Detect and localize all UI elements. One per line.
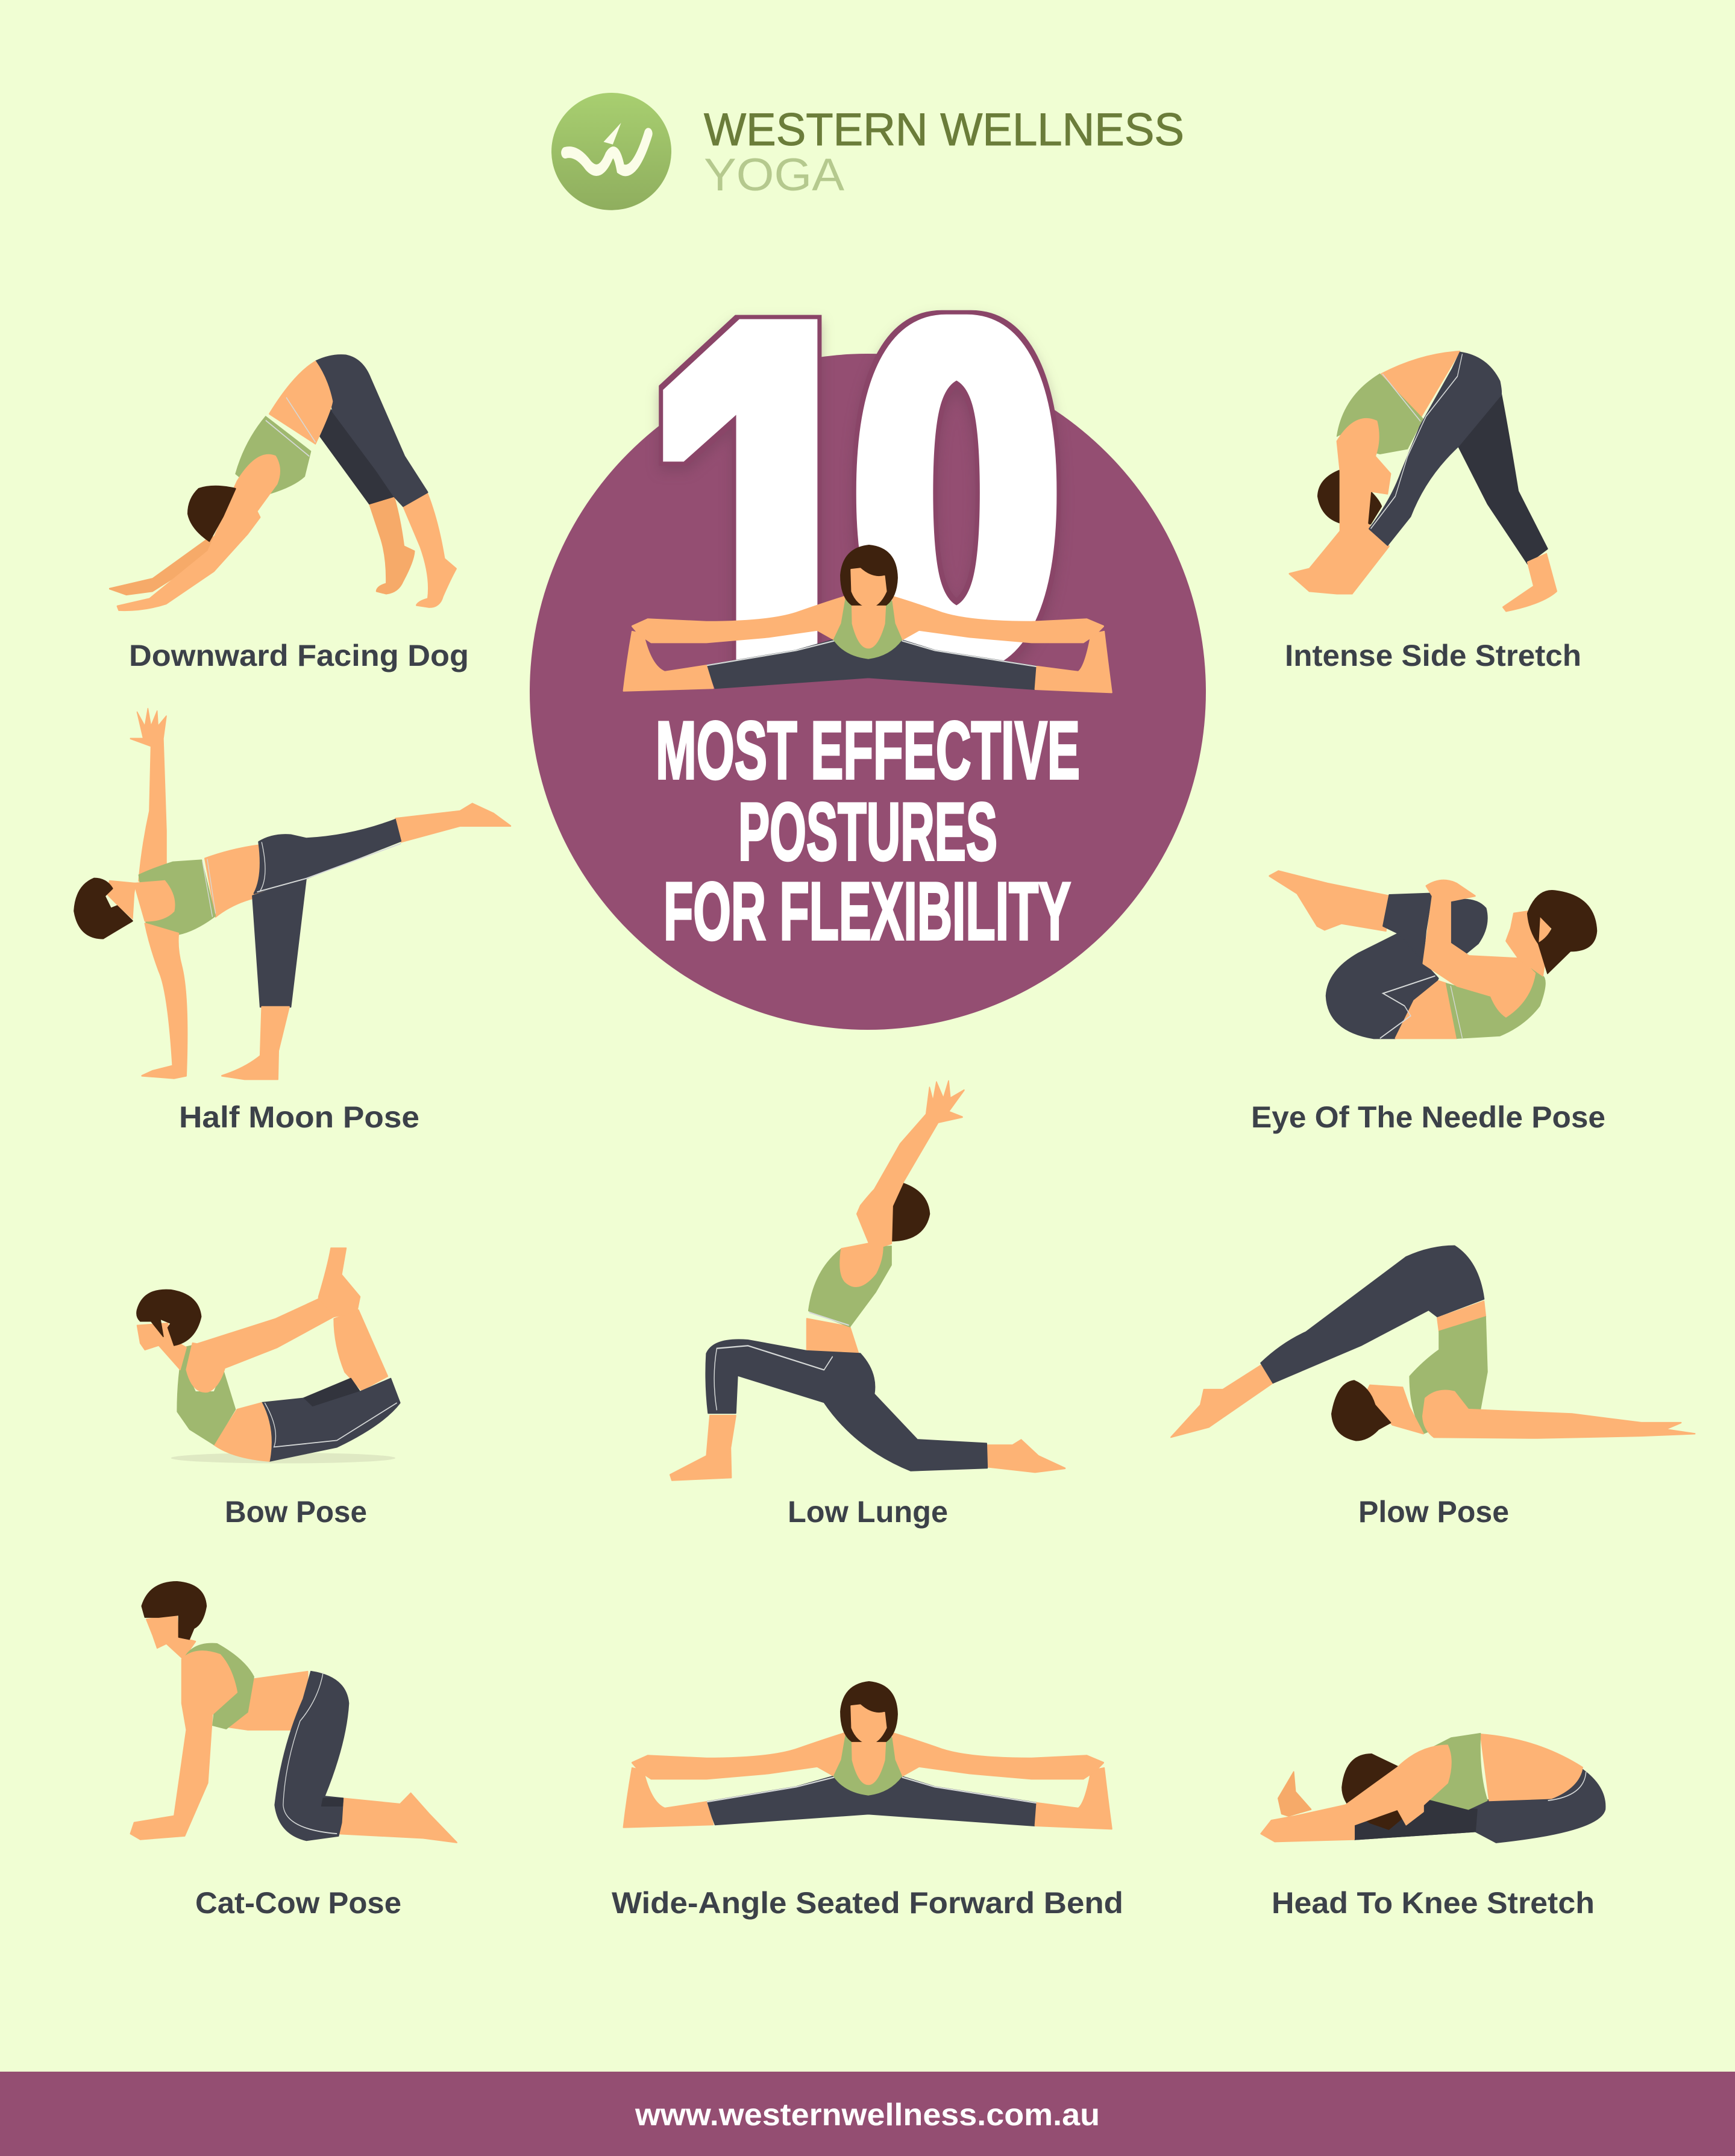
pose panel: Head To Knee Stretch bbox=[1261, 1734, 1605, 1920]
figure bbox=[670, 1081, 1065, 1480]
figure bbox=[130, 1582, 457, 1843]
pose panel: Intense Side Stretch bbox=[1285, 351, 1581, 672]
pose panel: Bow Pose bbox=[137, 1248, 400, 1529]
pose panel: Eye Of The Needle Pose bbox=[1251, 871, 1605, 1134]
label: Head To Knee Stretch bbox=[1272, 1886, 1595, 1920]
label: Low Lunge bbox=[788, 1495, 948, 1529]
digit 0: 0 bbox=[852, 230, 1061, 773]
title line 2: POSTURES bbox=[738, 786, 997, 877]
hero figure: wide-angle pose bbox=[623, 545, 1112, 692]
figure bbox=[1269, 871, 1596, 1038]
brand name: WESTERN WELLNESS bbox=[704, 104, 1184, 155]
label: Plow Pose bbox=[1358, 1495, 1509, 1529]
pose panel: Low Lunge bbox=[670, 1081, 1065, 1529]
title line 3: FOR FLEXIBILITY bbox=[664, 865, 1071, 957]
hero circle bbox=[530, 354, 1206, 1030]
figure bbox=[74, 709, 510, 1079]
icon: logo badge bbox=[551, 93, 671, 210]
label: Bow Pose bbox=[225, 1495, 367, 1529]
footer url: www.westernwellness.com.au bbox=[635, 2098, 1100, 2132]
pose panel: Half Moon Pose bbox=[74, 709, 510, 1134]
big number 10 bbox=[652, 310, 1061, 663]
pose panel: Plow Pose bbox=[1171, 1246, 1695, 1529]
label: Eye Of The Needle Pose bbox=[1251, 1100, 1605, 1134]
logo: Western Wellness Yoga bbox=[551, 93, 1184, 210]
label: Wide-Angle Seated Forward Bend bbox=[612, 1886, 1123, 1920]
label: Cat-Cow Pose bbox=[195, 1886, 401, 1920]
footer background bbox=[0, 2072, 1735, 2156]
figure bbox=[1261, 1734, 1605, 1843]
footer band bbox=[0, 2072, 1735, 2156]
label: Downward Facing Dog bbox=[129, 639, 469, 672]
pose panel: Cat-Cow Pose bbox=[130, 1582, 457, 1920]
figure bbox=[1289, 351, 1557, 611]
title line 1: MOST EFFECTIVE bbox=[656, 704, 1080, 796]
pose panel: Downward Facing Dog bbox=[110, 355, 469, 672]
title bbox=[656, 704, 1080, 957]
figure bbox=[1171, 1246, 1695, 1440]
figure bbox=[137, 1248, 400, 1464]
figure bbox=[110, 355, 456, 610]
figure bbox=[623, 1682, 1112, 1829]
label: Half Moon Pose bbox=[179, 1100, 419, 1134]
pose panel: Wide-Angle Seated Forward Bend bbox=[612, 1682, 1123, 1920]
brand sub-name: YOGA bbox=[704, 149, 844, 201]
label: Intense Side Stretch bbox=[1285, 639, 1581, 672]
digit 1: 1 bbox=[643, 184, 889, 891]
